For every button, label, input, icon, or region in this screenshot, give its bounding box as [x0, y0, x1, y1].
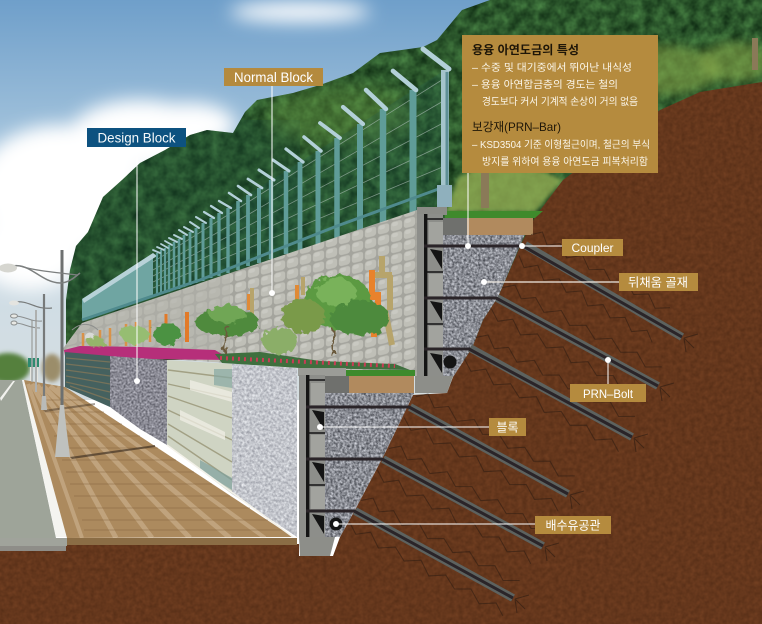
road	[0, 380, 67, 551]
callout: Coupler	[519, 239, 623, 256]
shrubs and trees	[87, 275, 390, 357]
lamp: near	[0, 250, 80, 457]
base rail	[82, 187, 444, 320]
gravel backfill	[320, 230, 530, 540]
text block: galvanizing properties: 경도보다 커서 기계적 손상이 거의 없음	[482, 95, 638, 108]
callout: Design Block	[87, 128, 186, 384]
lamp: far	[10, 310, 42, 392]
callout: Normal Block	[224, 68, 323, 296]
panel: hot-dip galvanizing and PRN-Bar notes	[462, 35, 658, 173]
fence	[82, 49, 452, 320]
hillside grass	[447, 173, 564, 211]
footing	[299, 537, 335, 556]
leader from panel to rebar	[465, 173, 471, 249]
callout: Coupler: Coupler	[572, 241, 614, 255]
callout: PRN-Bolt	[570, 357, 646, 402]
post caps	[153, 49, 449, 253]
PRN-Bolt anchors	[306, 228, 698, 617]
drain pipes	[330, 356, 456, 530]
callout: drainage pipe: 배수유공관	[546, 518, 600, 532]
orange and tan wall motif	[83, 256, 392, 346]
callout: backfill aggregate: 뒤채움 골재	[628, 276, 688, 290]
grout sleeves	[355, 245, 682, 598]
callout: Design Block: Design Block	[98, 130, 176, 146]
dark stacked stone	[65, 352, 110, 407]
tree trunks	[481, 38, 758, 208]
steel bars	[306, 246, 682, 598]
forest behind the wall	[60, 0, 762, 360]
text block: galvanizing properties	[472, 62, 638, 108]
text block: PRN-Bar: 방지를 위하여 용융 아연도금 피복처리함	[482, 155, 648, 168]
light stacked stone	[167, 360, 232, 494]
callout: drainage pipe	[333, 516, 611, 534]
lower wall facing panels	[65, 350, 300, 540]
end post box	[437, 185, 452, 207]
posts	[157, 70, 447, 296]
top soil strip	[445, 211, 543, 218]
heading: PRN-Bar: 보강재(PRN–Bar)	[472, 120, 561, 134]
heading: galvanizing properties: 용융 아연도금의 특성	[472, 43, 579, 57]
sand layer	[465, 218, 533, 235]
callout: backfill aggregate	[481, 273, 698, 291]
text block: PRN-Bar	[472, 139, 650, 168]
upper cross section: concrete, sand, blocks	[415, 207, 543, 393]
sky background	[0, 0, 762, 400]
block column	[417, 214, 443, 376]
callout: block	[317, 418, 526, 436]
lamp globe on far wall	[72, 324, 98, 342]
clouds	[0, 2, 370, 290]
street lamps	[0, 250, 80, 457]
text block: galvanizing properties: – 수중 및 대기중에서 뛰어난 내식성	[472, 62, 632, 74]
brick sidewalk	[24, 380, 297, 545]
lamp post shadow	[70, 445, 155, 459]
road kerb	[22, 380, 67, 537]
callout: Normal Block: Normal Block	[234, 70, 313, 85]
callout: PRN-Bolt: PRN–Bolt	[583, 387, 634, 401]
wires	[153, 78, 445, 288]
flower bed	[64, 346, 415, 376]
upper block wall face (Normal Block)	[62, 210, 417, 376]
concrete cap	[417, 207, 447, 215]
lamp: middle	[9, 294, 52, 410]
light granite panel	[232, 364, 297, 537]
footing	[415, 376, 453, 393]
concrete cap	[298, 368, 346, 376]
planting in front of the wall	[64, 275, 415, 376]
pavement edge	[67, 538, 297, 545]
sand layer	[348, 376, 414, 393]
far road, sign and distant trees	[0, 353, 62, 383]
soil cracks around bolts	[345, 228, 698, 617]
callout: block: 블록	[496, 420, 518, 434]
dark granite panel	[110, 356, 167, 445]
text block: PRN-Bar: – KSD3504 기준 이형철근이며, 철근의 부식	[472, 139, 650, 151]
block column	[299, 375, 325, 537]
text block: galvanizing properties: – 용융 아연합금층의 경도는 철의	[472, 78, 618, 91]
lower cross section: concrete, sand, blocks	[298, 368, 414, 556]
